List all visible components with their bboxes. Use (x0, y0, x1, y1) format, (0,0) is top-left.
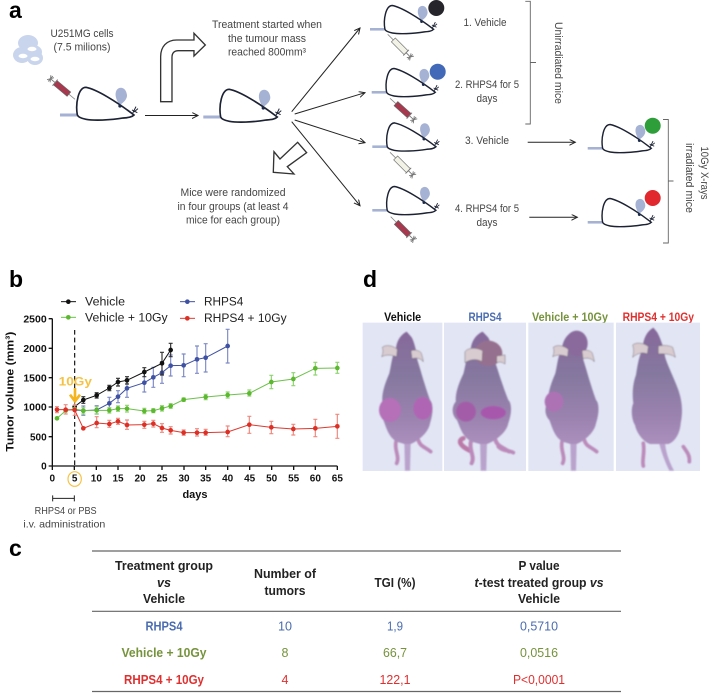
label group 1: 1. Vehicle (464, 17, 506, 29)
panel d: mouse photographs (363, 311, 700, 471)
label group 4: 4. RHPS4 for 5 (455, 203, 519, 215)
administration range bar (53, 495, 74, 501)
administration label: RHPS4 or PBS (35, 506, 97, 517)
table header: t-test treated group vs (474, 576, 604, 590)
column labels: RHPS4 + 10Gy (623, 311, 694, 324)
group 1 mouse (370, 0, 444, 61)
group 3 mouse (372, 123, 439, 179)
series: black Vehicle (72, 343, 173, 409)
axes (23, 314, 343, 484)
photo: vehicle + 10Gy mouse (528, 323, 614, 471)
text: treatment start: the tumour mass (228, 33, 306, 45)
row: RHPS4 + 10Gy: RHPS4 + 10Gy (124, 673, 204, 687)
label group 4: days (476, 217, 498, 229)
column labels: RHPS4 (468, 311, 502, 324)
panel letter d: d (363, 266, 377, 292)
icon: mouse with cells injected (60, 87, 138, 120)
axes: 55 (288, 473, 300, 484)
axes: 0 (50, 473, 56, 484)
irradiated mouse red (588, 190, 661, 227)
axes: 25 (156, 473, 168, 484)
label: unirradiated mice: Unirradiated mice (552, 22, 564, 104)
annotation: 10Gy: 10Gy (59, 375, 92, 389)
administration label: i.v. administration (23, 520, 106, 531)
panel c: results table (92, 551, 621, 692)
legend: Vehicle + 10Gy (85, 310, 168, 324)
legend: RHPS4 + 10Gy (204, 311, 287, 325)
row: RHPS4 + 10Gy: P<0,0001 (513, 673, 565, 687)
text: cells: (7.5 milions) (54, 42, 110, 54)
table header: Vehicle (143, 592, 185, 606)
highlight ring at day 5 (68, 472, 81, 486)
row: Vehicle + 10Gy: 66,7 (383, 646, 407, 660)
table header: Treatment group (115, 559, 213, 573)
axes: 35 (200, 473, 212, 484)
legend (61, 295, 287, 325)
irradiated mouse green (588, 118, 661, 153)
text: treatment start (212, 19, 322, 58)
arrow: to tumour-bearing mouse (145, 114, 198, 116)
series: green Vehicle + 10Gy (55, 362, 340, 421)
row: RHPS4: 1,9 (387, 620, 403, 634)
text: cells (50, 28, 114, 54)
arrow: 10Gy irradiation (70, 388, 80, 401)
label group 4 (455, 203, 519, 229)
row: RHPS4 + 10Gy (124, 673, 565, 687)
arrow: group 4 to irradiated (529, 216, 577, 218)
arrow: bent outlined arrow (161, 33, 205, 102)
row: RHPS4: RHPS4 (146, 620, 183, 634)
axes: 500 (30, 432, 47, 443)
label group 2: days (476, 93, 498, 105)
row: RHPS4: 0,5710 (520, 620, 558, 634)
axes: 2500 (23, 314, 47, 325)
column labels (384, 311, 694, 324)
row: RHPS4 + 10Gy: 4 (282, 673, 289, 687)
dashed line at day 5 (73, 330, 76, 466)
series: red RHPS4 + 10Gy (55, 405, 340, 438)
text: treatment start: reached 800mm³ (228, 46, 306, 58)
group 2 mouse (372, 64, 446, 124)
panel b: tumor volume chart (4, 295, 343, 531)
table header: P value (518, 559, 560, 573)
axis title x: days (182, 489, 208, 501)
text: randomization: in four groups (at least 4 (178, 201, 288, 213)
axes: 40 (222, 473, 234, 484)
axes: 50 (266, 473, 278, 484)
row: Vehicle + 10Gy: 8 (282, 646, 289, 660)
label group 3: 3. Vehicle (465, 135, 509, 147)
axes: 65 (332, 473, 343, 484)
axes: 10 (91, 473, 102, 484)
row: RHPS4 + 10Gy: 122,1 (380, 673, 411, 687)
arrow: group 3 to irradiated (528, 141, 575, 143)
text: cells: U251MG cells (50, 28, 114, 40)
label: irradiated mice (683, 143, 709, 213)
axes: 1500 (23, 373, 47, 384)
arrow: outlined down-left arrow (273, 142, 307, 174)
axes: 1000 (23, 403, 47, 414)
axes: 30 (178, 473, 190, 484)
text: treatment start: Treatment started when (212, 19, 322, 31)
table header (115, 559, 604, 606)
bracket: irradiated (663, 120, 674, 243)
legend: RHPS4 (204, 295, 244, 309)
table header: Vehicle (518, 592, 560, 606)
axes: 60 (310, 473, 321, 484)
icon: red syringe injection (46, 74, 78, 102)
label: irradiated mice: irradiated mice (683, 143, 695, 213)
axes: 2000 (23, 344, 47, 355)
row: Vehicle + 10Gy: Vehicle + 10Gy (122, 646, 207, 660)
icon: U251MG cells (13, 35, 43, 65)
group 4 mouse (372, 186, 439, 244)
row: RHPS4 (146, 620, 558, 634)
table header: Number of (254, 567, 317, 581)
table header: vs (157, 576, 171, 590)
panel letter c: c (9, 535, 22, 561)
administration label (23, 506, 106, 531)
text: randomization: mice for each group) (186, 214, 280, 226)
label group 2: 2. RHPS4 for 5 (455, 79, 519, 91)
photo: vehicle mouse (363, 323, 442, 471)
axes: 0 (41, 462, 47, 473)
panel a: experimental design (9, 0, 709, 244)
row: RHPS4: 10 (278, 620, 292, 634)
table header: TGI (%) (374, 576, 416, 590)
table rules (92, 551, 621, 692)
icon: tumour-bearing mouse (203, 89, 281, 122)
axes: 20 (134, 473, 146, 484)
panel letter b: b (9, 266, 23, 292)
axes: 5 (72, 473, 78, 484)
text: randomization: Mice were randomized (180, 187, 286, 199)
series: blue RHPS4 (75, 329, 230, 415)
legend: Vehicle (85, 295, 125, 309)
bracket: unirradiated (525, 1, 536, 124)
arrows: randomization fan (292, 28, 365, 206)
column labels: Vehicle + 10Gy (532, 311, 608, 324)
axes: 15 (112, 473, 124, 484)
text: randomization (178, 187, 288, 226)
axis title y: Tumor volume (mm³) (4, 331, 16, 452)
table header: tumors (264, 584, 306, 598)
photo: RHPS4 + 10Gy mouse (616, 323, 700, 471)
column labels: Vehicle (384, 311, 422, 324)
label group 2 (455, 79, 519, 105)
axes: 45 (244, 473, 256, 484)
row: Vehicle + 10Gy: 0,0516 (520, 646, 558, 660)
photo: RHPS4 mouse (444, 323, 526, 471)
row: Vehicle + 10Gy (122, 646, 558, 660)
